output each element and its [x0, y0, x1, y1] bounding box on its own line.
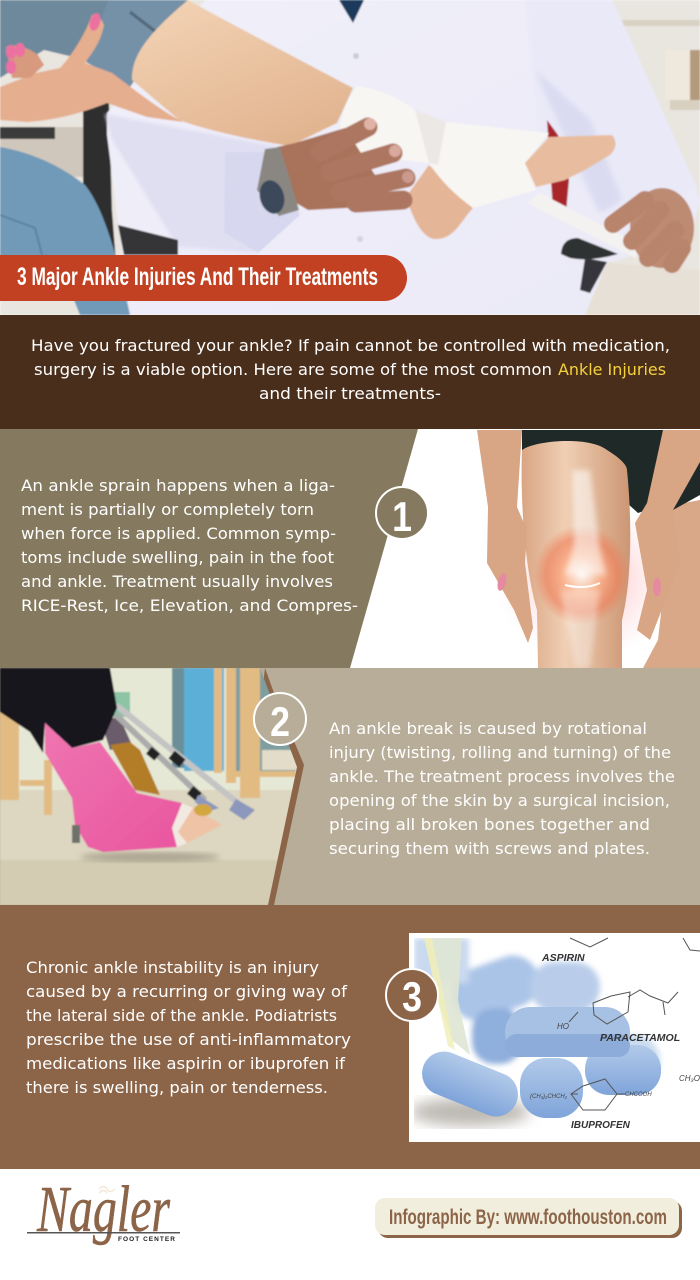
panel 3: chronic ankle instability	[0, 905, 700, 1169]
pills photo: CH₃O	[679, 1074, 700, 1083]
intro band: and their treatments-	[259, 384, 441, 403]
intro band: Ankle Injuries	[558, 360, 666, 379]
text block 2	[329, 719, 675, 858]
wristwatch	[257, 147, 299, 216]
pills photo: (CH₃)₂CHCH₂	[530, 1094, 568, 1100]
text block 2: securing them with screws and plates.	[329, 839, 650, 858]
text block 2: opening of the skin by a surgical incision,	[329, 791, 670, 810]
pills photo: CHCOOH	[625, 1092, 652, 1098]
number badge 1	[376, 487, 428, 541]
text block 3: Chronic ankle instability is an injury	[26, 958, 319, 977]
text block 2: injury (twisting, rolling and turning) of the	[329, 743, 671, 762]
text block 3: the lateral side of the ankle. Podiatrists	[26, 1006, 337, 1025]
pink cast	[45, 723, 182, 852]
pills photo	[409, 933, 700, 1142]
hero photo: doctor bandaging an ankle	[0, 0, 700, 315]
text block 2: ankle. The treatment process involves the	[329, 767, 675, 786]
panel 1: ankle sprain	[0, 429, 700, 668]
doctor's left hand holding ankle	[277, 118, 414, 210]
knee photo	[477, 430, 700, 668]
panel 2: ankle break	[0, 668, 700, 905]
number badge 2: 2	[270, 699, 290, 746]
pills photo: PARACETAMOL	[600, 1032, 680, 1044]
intro band: surgery is a viable option. Here are some of the most common	[34, 360, 552, 379]
number badge 3	[386, 969, 438, 1021]
intro band: Have you fractured your ankle? If pain cannot be controlled with medication,	[31, 336, 670, 355]
pills photo: HO	[557, 1022, 569, 1031]
crutches	[116, 705, 255, 820]
front pills	[585, 1045, 661, 1095]
title banner: 3 Major Ankle Injuries And Their Treatments	[17, 263, 378, 291]
pills photo: IBUPROFEN	[571, 1120, 631, 1131]
number badge 2	[254, 693, 306, 746]
number badge 3: 3	[402, 974, 422, 1021]
text block 1: and ankle. Treatment usually involves	[21, 572, 333, 591]
footer logo: Nagler Foot Center: Nagler	[36, 1173, 170, 1246]
intro band	[0, 315, 700, 429]
text block 1: toms include swelling, pain in the foot	[21, 548, 334, 567]
text block 3: there is swelling, pain or tenderness.	[26, 1078, 328, 1097]
female hand	[0, 15, 183, 122]
cast photo	[0, 668, 302, 905]
text block 3: prescribe the use of anti-inflammatory	[26, 1030, 351, 1049]
footer logo: Nagler Foot Center: FOOT CENTER	[118, 1236, 175, 1243]
text block 3: medications like aspirin or ibuprofen if	[26, 1054, 345, 1073]
chemical structures	[569, 938, 700, 1110]
doctor's right hand	[613, 188, 694, 268]
pills photo: ASPIRIN	[541, 952, 585, 964]
text block 1: when force is applied. Common symp-	[21, 524, 336, 543]
text block 1	[21, 476, 358, 615]
text block 3	[26, 958, 351, 1097]
title banner	[0, 255, 407, 301]
text block 1: RICE-Rest, Ice, Elevation, and Compres-	[21, 596, 358, 615]
footer credit badge	[375, 1198, 682, 1238]
text block 2: placing all broken bones together and	[329, 815, 650, 834]
text block 1: ment is partially or completely torn	[21, 500, 314, 519]
text block 1: An ankle sprain happens when a liga-	[21, 476, 335, 495]
text block 2: An ankle break is caused by rotational	[329, 719, 647, 738]
number badge 1: 1	[392, 494, 412, 541]
text block 3: caused by a recurring or giving way of	[26, 982, 347, 1001]
